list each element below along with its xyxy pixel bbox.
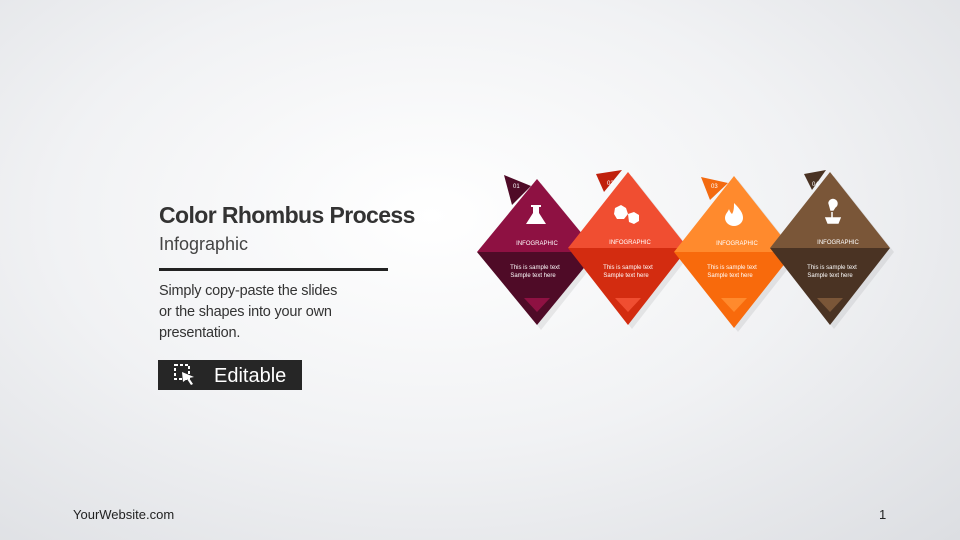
rhombus 01: 01 [513,184,520,190]
rhombus 04: 04 [812,182,819,188]
rhombus 03: This is sample text [707,265,757,271]
rhombus 03: Sample text here [707,273,753,279]
rhombus 02: INFOGRAPHIC [609,240,652,246]
rhombus 03: INFOGRAPHIC [716,241,758,247]
rhombus 04: This is sample text [807,265,857,271]
description text: or the shapes into your own [159,304,332,320]
description text: presentation. [159,325,240,341]
title: Color Rhombus Process [159,202,415,228]
subtitle: Infographic [159,234,248,254]
editable badge [158,360,302,390]
rhombus 01 [477,175,600,330]
editable badge: Editable [214,365,286,387]
rhombus 02: Sample text here [603,273,649,279]
rhombus 04: Sample text here [807,273,853,279]
page number: 1 [879,507,886,522]
rhombus 04: INFOGRAPHIC [817,240,860,246]
rhombus 02: 02 [607,181,614,187]
icon: cursor [174,364,194,385]
description text [159,283,337,341]
rhombus 01: INFOGRAPHIC [516,241,558,247]
description text: Simply copy-paste the slides [159,283,337,299]
rhombus 01: Sample text here [510,273,556,279]
rhombus 03: 03 [711,184,718,190]
rhombus 03 [674,176,798,332]
rhombus 01: This is sample text [510,265,560,271]
divider line [159,268,388,271]
rhombus 04 [770,170,894,329]
rhombus 02 [568,170,692,329]
footer website: YourWebsite.com [73,507,174,522]
rhombus 02: This is sample text [603,265,653,271]
